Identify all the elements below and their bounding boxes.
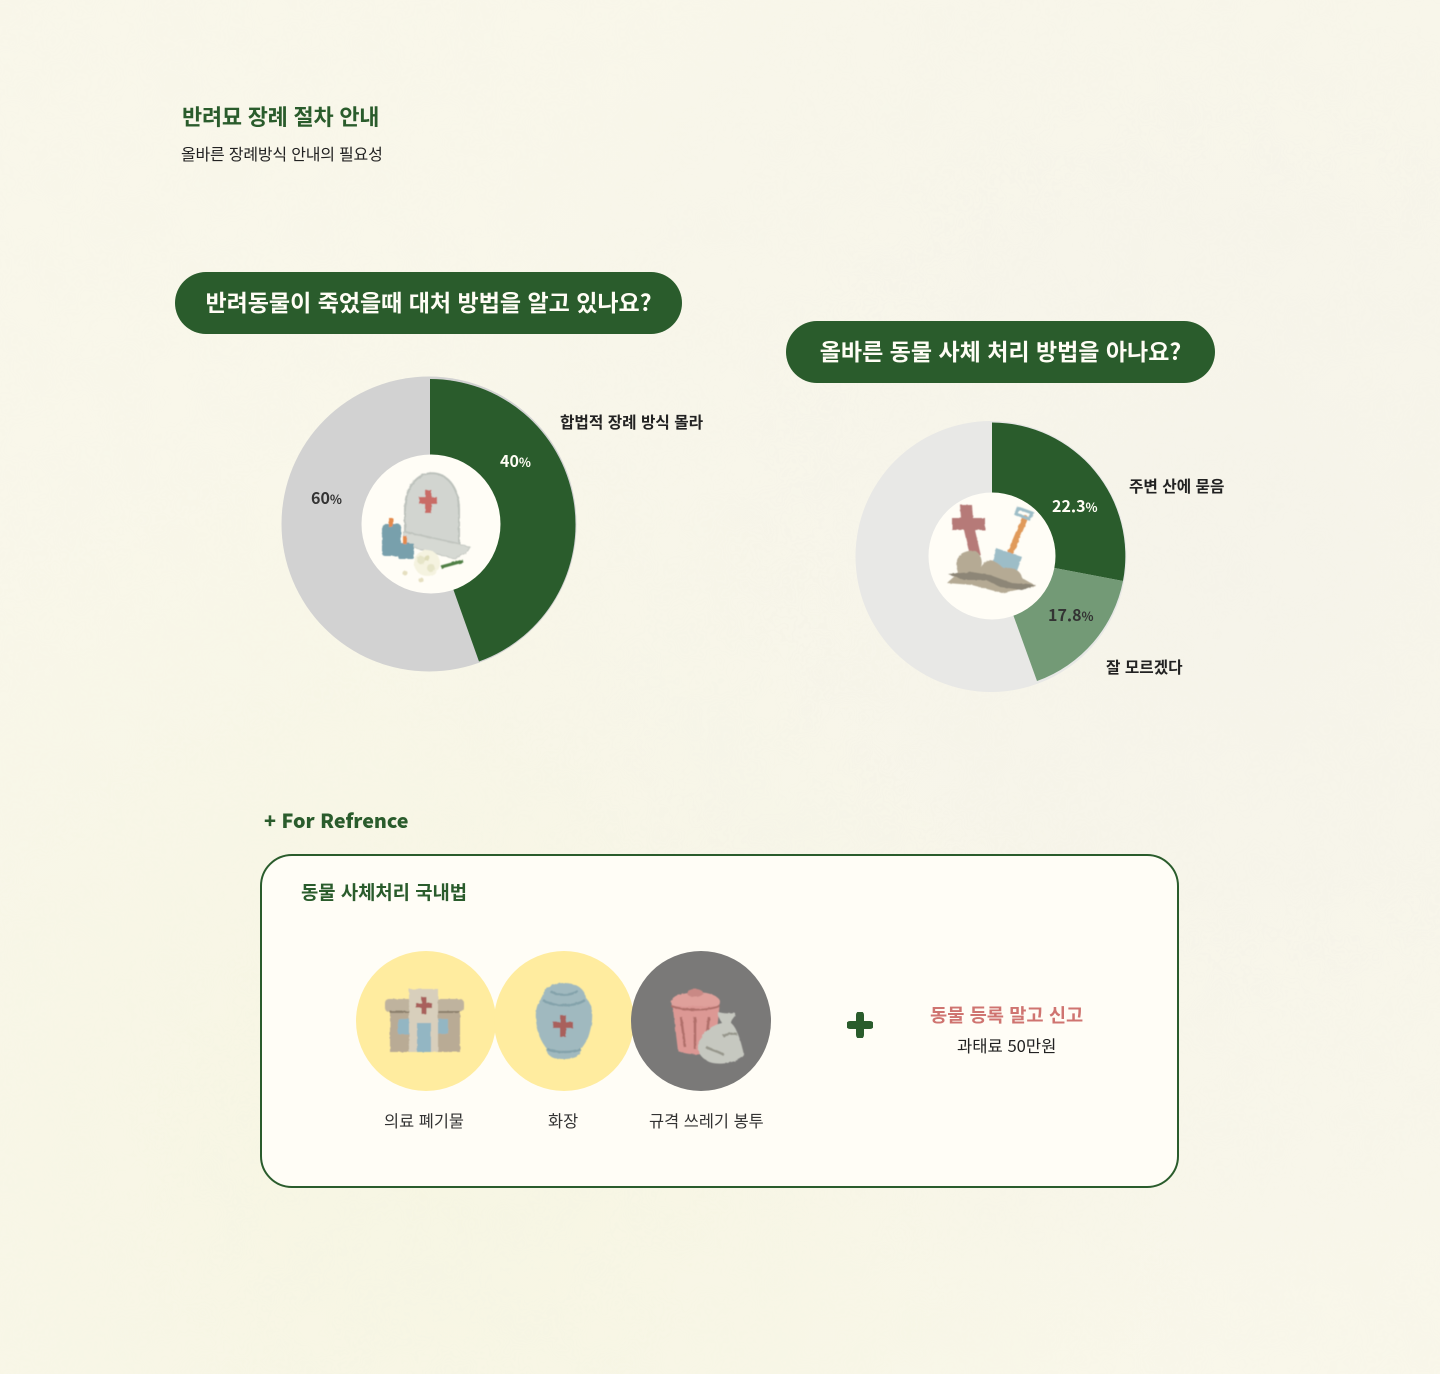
icon: trash bin and bag	[631, 951, 771, 1091]
icon: gravestone with candles and flowers	[382, 473, 470, 582]
title: 반려묘 장례 절차 안내	[182, 101, 379, 132]
label: medical waste: 의료 폐기물	[384, 1108, 464, 1132]
heading pill: question two: 올바른 동물 사체 처리 방법을 아나요?	[820, 333, 1181, 367]
panel: domestic law	[260, 854, 1179, 1188]
heading pill: question one	[175, 272, 682, 334]
label: 22.3 percent: 22.3%	[1052, 493, 1098, 517]
label: standard trash bag: 규격 쓰레기 봉투	[649, 1108, 764, 1132]
label: buried on nearby hill: 주변 산에 묻음	[1129, 474, 1224, 497]
icon: cremation urn	[495, 951, 632, 1091]
label: 60 percent: 60%	[311, 485, 342, 509]
heading pill: question one: 반려동물이 죽었을때 대처 방법을 알고 있나요?	[205, 284, 652, 318]
label: 40 percent: 40%	[500, 448, 531, 472]
icon: plus	[847, 1012, 873, 1038]
callout: report without registration: 동물 등록 말고 신고	[930, 1001, 1083, 1028]
reference heading: + For Refrence	[264, 805, 409, 834]
panel heading: 동물 사체처리 국내법	[301, 878, 467, 905]
chart: donut two	[856, 421, 1126, 692]
icon: medical waste	[356, 951, 495, 1091]
chart: donut one	[282, 376, 1126, 692]
label: unaware of legal method: 합법적 장례 방식 몰라	[560, 410, 703, 433]
icon: cross, soil and shovel	[947, 505, 1036, 593]
label: not sure: 잘 모르겠다	[1106, 655, 1183, 678]
label: 17.8 percent: 17.8%	[1048, 602, 1094, 626]
heading pill: question two	[786, 321, 1215, 383]
callout: fine: 과태료 50만원	[957, 1033, 1056, 1057]
subtitle: 올바른 장례방식 안내의 필요성	[181, 141, 383, 165]
label: cremation: 화장	[548, 1108, 578, 1132]
